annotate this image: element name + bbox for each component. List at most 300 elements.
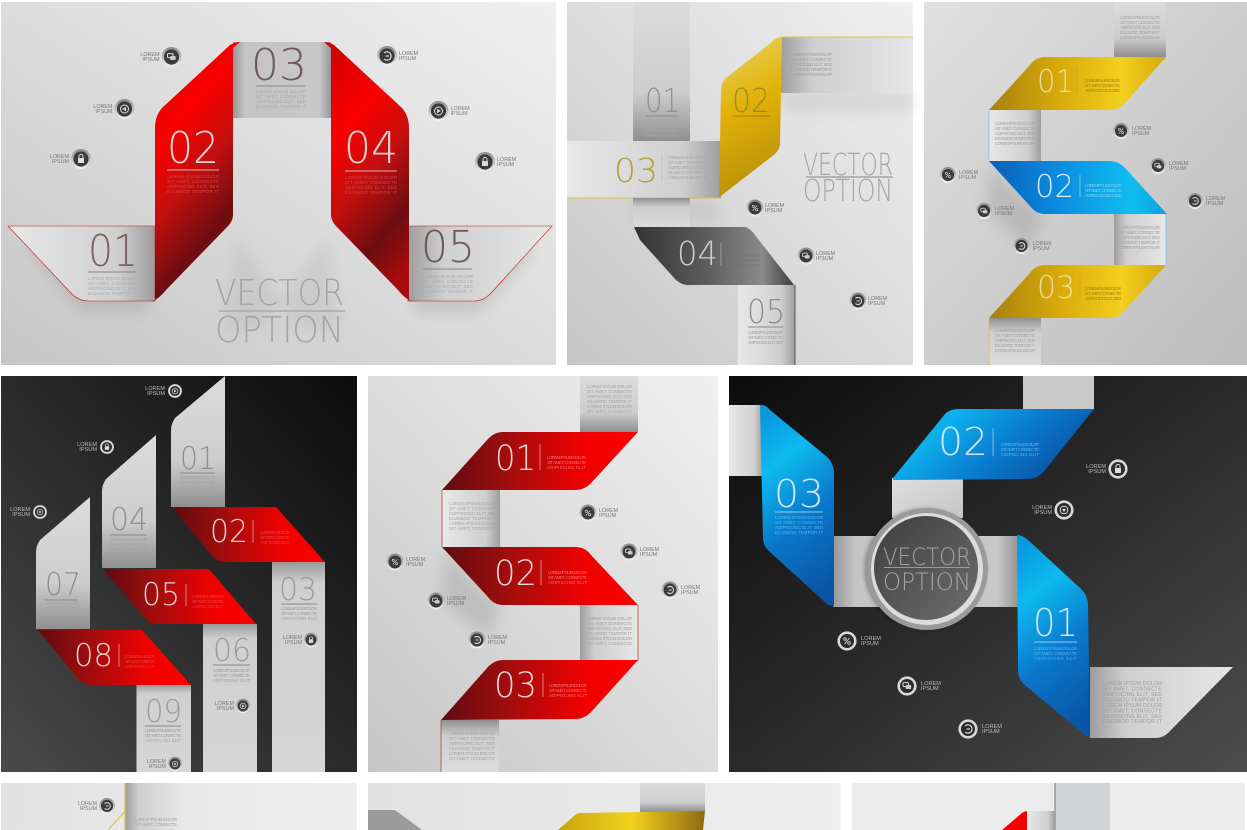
ribbon step 04 dark — [634, 227, 794, 285]
icon: gear on column 09 — [147, 757, 182, 771]
grey column — [1055, 783, 1110, 830]
icon: euro left: IPSUM — [488, 640, 506, 646]
icon: euro: IPSUM — [982, 729, 1000, 735]
body text: LOREM IPSUM DOLOR — [135, 817, 177, 822]
column body texts: SIT AMET, CONSECTE — [1120, 20, 1160, 25]
step 02 number and text: SIT AMET, CONSECTE — [1001, 447, 1039, 452]
icon: lock: LOREM — [77, 442, 97, 448]
icon: lock: IPSUM — [79, 447, 97, 453]
column body texts: SIT AMET, CONSECTE — [587, 409, 632, 414]
step 06 text: LOREM IPSUM DOLOR — [213, 668, 250, 673]
step 04 number and text: SIT AMET, CONSECTE — [345, 180, 397, 185]
step 04 text: SIT AMET, CONSECTE — [110, 542, 147, 547]
icon: euro right — [662, 582, 701, 598]
icon: gear — [1032, 500, 1074, 520]
step 01 number and text: ADIPISCING ELIT, SED — [88, 286, 137, 291]
icon: chat right — [620, 544, 660, 560]
column body texts: LOREM IPSUM DOLOR — [995, 348, 1035, 353]
icon: lock on column 03: IPSUM — [285, 640, 303, 646]
step 04 number and text: 04 — [677, 234, 718, 273]
step 03 number and text: ADIPISCING ELIT, SED — [668, 165, 707, 170]
step 01 number and text: LOREM IPSUM DOLOR — [645, 118, 679, 123]
icon: percent: IPSUM — [765, 208, 783, 214]
step 05 number and text: LOREM IPSUM DOLOR — [423, 274, 473, 279]
grey end body text: SIT AMET, CONSECTE — [1103, 686, 1163, 692]
step 05 number and text: LOREM IPSUM DOLOR — [748, 330, 783, 335]
step 01 text: SIT AMET, CONSECTE — [180, 480, 215, 485]
ribbon 05 — [103, 569, 256, 624]
panel: cropped bottom left — [1, 783, 357, 830]
column body texts: EIUSMOD TEMPOR IT — [449, 516, 497, 521]
ribbon step 01 — [442, 432, 638, 490]
icon: gear: LOREM — [1032, 505, 1052, 511]
grey column — [125, 783, 181, 830]
column 01 — [171, 376, 225, 507]
step 02 number and text — [494, 554, 587, 594]
step 04 text: LOREM IPSUM DOLOR — [110, 537, 147, 542]
icon: euro: LOREM — [982, 724, 1002, 730]
step 02 number and text: ADIPISCING ELIT — [1001, 452, 1039, 457]
column 04 — [102, 435, 156, 568]
column body texts: ADIPISCING ELIT, SED — [449, 511, 497, 516]
column 06 — [203, 624, 257, 772]
icon: chat left — [976, 203, 1015, 219]
step 01 number and text — [88, 226, 138, 296]
step 02 number and text: SIT AMET, CONSECTE — [167, 179, 219, 184]
step 01 number and text — [1037, 64, 1120, 100]
step 01 text — [180, 441, 216, 490]
step 03 number and text: LOREM IPSUM DOLOR — [1085, 286, 1121, 291]
grey end body text: ADIPISCING ELIT, SED — [1103, 714, 1162, 720]
step 04 text: 04 — [110, 502, 148, 538]
step 02 text: 02 — [210, 514, 248, 550]
step 04 number and text — [344, 123, 398, 195]
step 01 number and text: LOREM IPSUM DOLOR — [1034, 646, 1077, 651]
icon: euro right — [1187, 193, 1226, 209]
icon: back — [93, 99, 134, 119]
icon: euro — [850, 292, 888, 310]
icon: chat: LOREM — [921, 681, 941, 687]
icon: euro left: LOREM — [488, 635, 508, 641]
ribbon step 05 column — [738, 285, 795, 365]
column body texts: LOREM IPSUM DOLOR — [587, 384, 632, 389]
step 09 text: 09 — [145, 694, 182, 730]
column body texts: LOREM IPSUM DOLOR — [587, 616, 632, 621]
grey horizontal connector — [833, 536, 1018, 607]
step 01 number and text: 01 — [645, 81, 680, 120]
panel: red zigzag ribbon — [368, 376, 718, 772]
icon: percent — [1113, 123, 1152, 139]
grey end body text: SIT AMET, CONSECTE — [1103, 708, 1163, 714]
step 01 number and text — [495, 439, 586, 479]
icon: chat: LOREM — [140, 52, 160, 58]
center badge with vector option title: VECTOR — [883, 543, 971, 571]
icon: play — [428, 101, 470, 121]
vector option title — [215, 273, 345, 351]
ribbon step 02 blue — [989, 161, 1167, 214]
icon: lock on column 03 — [283, 633, 318, 647]
step 01 number and text: LOREM IPSUM DOLOR — [88, 276, 137, 281]
column body texts: EIUSMOD TEMPOR IT — [995, 136, 1035, 141]
ribbon step 03 — [441, 660, 638, 720]
icon: chat: IPSUM — [142, 57, 160, 63]
step 01 number and text: ADIPISCING ELIT — [1034, 656, 1077, 661]
icon: percent right — [580, 504, 619, 522]
icon: lock on column 03: LOREM — [283, 635, 303, 641]
step 01 text: ADIPISCING ELIT — [180, 485, 215, 490]
icon: gear: LOREM — [10, 507, 30, 513]
step 02 number and text: SIT AMET, CONSECTE — [1085, 188, 1122, 193]
panel: gold and dark folded ribbon — [567, 2, 913, 365]
ribbon 02 — [172, 507, 325, 562]
icon: lock right: LOREM — [497, 157, 517, 163]
step 01 number and text: ADIPISCING ELIT — [547, 465, 586, 470]
ribbon top right band — [780, 37, 913, 93]
step 05 number and text: 05 — [747, 292, 785, 331]
column body texts: EIUSMOD TEMPOR IT — [587, 399, 632, 404]
step 01 number and text: SIT AMET, CONSECTE — [88, 281, 137, 286]
step 05 number and text: 05 — [421, 222, 475, 273]
step 03 number and text: ADIPISCING ELIT, SED — [256, 99, 306, 104]
step 05 number and text — [421, 222, 475, 294]
step 04 number and text — [677, 234, 760, 273]
vector option title: OPTION — [803, 174, 893, 209]
center badge with vector option title — [865, 508, 988, 630]
step 03 number and text: ADIPISCING ELIT, SED — [1085, 296, 1121, 301]
step 04 number and text: SIT AMET, CONSECTE — [726, 258, 760, 263]
step 02 text: ADIPISCING ELIT — [260, 540, 290, 545]
icon: play: LOREM — [450, 106, 470, 112]
step 03 number and text — [1037, 270, 1121, 306]
step 09 text: ADIPISCING ELIT — [145, 738, 181, 743]
icon: lock — [1086, 459, 1128, 479]
icon: percent left: LOREM — [406, 557, 426, 563]
grey vertical connector — [892, 478, 963, 518]
step 03 number and text: SIT AMET, CONSECTE — [668, 160, 707, 165]
step 02 number and text: LOREM IPSUM DOLOR — [548, 570, 587, 575]
step 03 number and text: LOREM IPSUM DOLOR — [775, 515, 823, 520]
column body texts: SIT AMET, CONSECTE — [1119, 230, 1160, 235]
step 05 number and text: ADIPISCING ELIT, SED — [423, 284, 473, 289]
icon: euro left: IPSUM — [1032, 246, 1050, 252]
step 04 number and text: ADIPISCING ELIT, SED — [726, 263, 760, 268]
icon: percent — [746, 200, 785, 216]
column body texts: ADIPISCING ELIT, SED — [1119, 235, 1160, 240]
step 03 number and text: SIT AMET, CONSECTE — [256, 94, 306, 99]
vector option title: VECTOR — [215, 273, 344, 314]
step 01 number and text: LOREM IPSUM DOLOR — [1085, 78, 1120, 83]
top band text: ADIPISCING ELIT, SED — [791, 62, 832, 67]
icon: percent right: IPSUM — [599, 513, 617, 519]
ribbon step 03 band — [567, 141, 721, 198]
icon: percent left: IPSUM — [406, 562, 424, 568]
ribbon right column — [1114, 214, 1166, 265]
step 01 number and text: SIT AMET, CONSECTE — [645, 123, 679, 128]
top band text: EIUSMOD TEMPOR IT — [791, 67, 832, 72]
icon: lock: LOREM — [1086, 464, 1106, 470]
step 03 number and text: 03 — [494, 666, 537, 706]
step 07 text: 07 — [45, 567, 81, 603]
icon: percent left: LOREM — [959, 170, 979, 176]
icon: percent left: IPSUM — [959, 175, 977, 181]
ribbon step 02 — [150, 42, 240, 302]
column body texts: LOREM IPSUM DOLOR — [1119, 245, 1160, 250]
left grey fragment — [368, 810, 422, 830]
vector option title: OPTION — [215, 310, 344, 351]
column body texts: ADIPISCING ELIT, SED — [995, 338, 1035, 343]
step 05 text: LOREM IPSUM DOLOR — [192, 594, 224, 599]
vector option title — [803, 148, 893, 209]
step 03 number and text: ADIPISCING ELIT — [549, 693, 587, 698]
icon: chat right — [1150, 158, 1189, 174]
icon: percent: LOREM — [861, 636, 881, 642]
column body texts: LOREM IPSUM DOLOR — [1120, 35, 1160, 40]
step 03 text: 03 — [279, 572, 317, 608]
column body texts: SIT AMET, CONSECTE — [449, 736, 495, 741]
column 03 — [272, 562, 325, 772]
icon: chat right: LOREM — [640, 547, 660, 553]
ribbon step 03 — [233, 42, 331, 118]
step 04 number and text: LOREM IPSUM DOLOR — [726, 253, 760, 258]
icon: euro: IPSUM — [399, 56, 417, 62]
column body texts: SIT AMET, CONSECTE — [449, 506, 497, 511]
ribbon step 05 — [408, 226, 552, 301]
icon: chat left: IPSUM — [447, 601, 465, 607]
icon: euro — [78, 798, 115, 814]
icon: lock right — [475, 152, 517, 172]
step 03 number and text: EIUSMOD TEMPOR IT — [775, 530, 823, 535]
column body texts: ADIPISCING ELIT, SED — [587, 626, 632, 631]
icon: gear — [10, 505, 47, 519]
step 03 number and text: 03 — [1037, 270, 1075, 306]
grey end body text: LOREM IPSUM DOLOR — [1103, 681, 1162, 687]
column body texts: LOREM IPSUM DOLOR — [995, 121, 1035, 126]
step 05 number and text: SIT AMET, CONSECTE — [423, 279, 473, 284]
step 08 text: 08 — [74, 638, 113, 674]
step 01 number and text: 01 — [1037, 64, 1074, 100]
icon: euro: IPSUM — [868, 301, 886, 307]
column body texts: EIUSMOD TEMPOR IT — [449, 746, 495, 751]
icon: euro left — [468, 632, 508, 648]
icon: euro left: LOREM — [1032, 241, 1052, 247]
column body texts: LOREM IPSUM DOLOR — [587, 636, 632, 641]
icon: gear: IPSUM — [1034, 510, 1052, 516]
panel: cropped bottom right — [852, 783, 1245, 830]
step 04 number and text: ADIPISCING ELIT, SED — [345, 185, 397, 190]
blue ribbon 02 — [893, 409, 1094, 480]
blue ribbon 01 — [1017, 535, 1090, 737]
column body texts: ADIPISCING ELIT, SED — [449, 741, 495, 746]
grey column — [640, 783, 705, 812]
step 03 text: SIT AMET, CONSECTE — [281, 611, 317, 616]
icon: chat right: IPSUM — [1169, 166, 1187, 172]
step 02 number and text — [1035, 169, 1122, 205]
icon: play on column 06: IPSUM — [217, 706, 235, 712]
icon: play on column 06 — [215, 699, 250, 713]
icon: chat: IPSUM — [921, 686, 939, 692]
icon: euro right: IPSUM — [1206, 201, 1224, 207]
step 03 number and text: 03 — [774, 472, 824, 516]
step 02 text — [210, 514, 290, 550]
ribbon step 03 gold — [989, 265, 1166, 318]
column body texts: EIUSMOD TEMPOR IT — [1119, 240, 1160, 245]
ribbon left column lower — [989, 318, 1041, 365]
column body texts: LOREM IPSUM DOLOR — [995, 328, 1035, 333]
ribbon connector — [633, 198, 690, 228]
gold ribbon — [558, 811, 705, 830]
step 03 text: LOREM IPSUM DOLOR — [281, 606, 317, 611]
icon: euro right: LOREM — [1206, 196, 1226, 202]
step 03 number and text: LOREM IPSUM DOLOR — [668, 155, 707, 160]
blue ribbon 03 — [760, 405, 834, 606]
grey fold — [1027, 811, 1055, 830]
panel: gold and blue zigzag ribbon — [924, 2, 1247, 365]
icon: chat left — [428, 592, 467, 610]
grey stub top — [1023, 376, 1094, 409]
ribbon top column — [580, 376, 638, 432]
step 02 number and text — [938, 420, 1039, 464]
step 05 text — [142, 577, 224, 613]
step 07 text: SIT AMET, CONSECTE — [45, 606, 78, 611]
column 09 — [136, 685, 191, 772]
icon: lock: IPSUM — [1088, 469, 1106, 475]
icon: percent: LOREM — [765, 203, 785, 209]
ribbon left column upper — [989, 110, 1041, 161]
step 02 number and text: EIUSMOD TEMPOR IT — [167, 189, 219, 194]
step 02 number and text: 02 — [494, 554, 537, 594]
icon: euro: IPSUM — [80, 806, 98, 812]
icon: chat: LOREM — [816, 251, 836, 257]
top band text: LOREM IPSUM DOLOR — [791, 72, 832, 77]
column body texts: SIT AMET, CONSECTE — [587, 389, 632, 394]
icon: lock: LOREM — [50, 154, 70, 160]
column 07 — [36, 497, 90, 629]
icon: lock right: IPSUM — [497, 162, 515, 168]
step 01 number and text: ADIPISCING ELIT, SED — [1085, 88, 1120, 93]
step 02 number and text: 02 — [1035, 169, 1074, 205]
step 03 number and text: SIT AMET, CONSECTE — [1085, 291, 1121, 296]
icon: euro left — [1014, 238, 1052, 254]
icon: play: IPSUM — [450, 111, 468, 117]
icon: percent left — [386, 554, 426, 570]
step 01 number and text: SIT AMET, CONSECTE — [547, 460, 586, 465]
top band text: SIT AMET, CONSECTE — [791, 57, 832, 62]
step 03 number and text: 03 — [614, 151, 658, 190]
step 07 text: ADIPISCING ELIT — [45, 611, 78, 616]
step 01 number and text: ADIPISCING ELIT, SED — [645, 128, 679, 133]
step 09 text: LOREM IPSUM DOLOR — [145, 728, 181, 733]
step 03 number and text: LOREM IPSUM DOLOR — [549, 683, 587, 688]
step 04 number and text: LOREM IPSUM DOLOR — [345, 175, 397, 180]
step 04 text: ADIPISCING ELIT — [110, 547, 147, 552]
icon: gear on column 09: IPSUM — [149, 764, 167, 770]
step 02 number and text: SIT AMET, CONSECTE — [548, 575, 587, 580]
column body texts: SIT AMET, CONSECTE — [449, 526, 497, 531]
center badge with vector option title: OPTION — [883, 568, 971, 596]
ribbon step 04 — [324, 42, 414, 302]
grey end body text: ADIPISCING ELIT, SED — [1103, 692, 1162, 698]
step 01 text: LOREM IPSUM DOLOR — [180, 475, 215, 480]
panel: dark staircase with red ribbons — [1, 376, 357, 772]
step 07 text — [45, 567, 81, 616]
grey end body text: EIUSMOD TEMPOR IT — [1103, 698, 1163, 704]
step 03 number and text: SIT AMET, CONSECTE — [549, 688, 587, 693]
column body texts: EIUSMOD TEMPOR IT — [995, 343, 1035, 348]
panel: dark pinwheel with blue ribbons — [729, 376, 1247, 772]
step 02 number and text: LOREM IPSUM DOLOR — [167, 174, 219, 179]
column body texts: ADIPISCING ELIT, SED — [1120, 25, 1160, 30]
step 02 text: SIT AMET, CONSECTE — [260, 535, 290, 540]
icon: chat right: IPSUM — [640, 552, 658, 558]
step 01 number and text: 01 — [88, 226, 138, 277]
icon: chat: IPSUM — [816, 256, 834, 262]
panel: red arch ribbon with five steps — [1, 2, 556, 365]
ribbon step 02 — [442, 547, 638, 605]
icon: play top: IPSUM — [147, 391, 165, 397]
ribbon step 01 column — [633, 2, 690, 141]
step 05 number and text — [747, 292, 785, 345]
step 03 number and text: EIUSMOD TEMPOR IT — [256, 104, 306, 109]
icon: euro: LOREM — [399, 51, 419, 57]
ribbon right column — [580, 605, 638, 661]
column body texts: SIT AMET, CONSECTE — [995, 333, 1035, 338]
step 04 number and text: EIUSMOD TEMPOR IT — [345, 190, 397, 195]
column body texts: LOREM IPSUM DOLOR — [1120, 15, 1160, 20]
icon: gear on column 09: LOREM — [147, 759, 167, 765]
column body texts: EIUSMOD TEMPOR IT — [587, 631, 632, 636]
icon: back: IPSUM — [95, 109, 113, 115]
icon: chat — [897, 676, 941, 696]
step 01 number and text: 01 — [495, 439, 536, 479]
grey ribbon end — [1090, 667, 1233, 738]
icon: percent: LOREM — [1132, 126, 1152, 132]
icon: lock: IPSUM — [52, 159, 70, 165]
column body texts: LOREM IPSUM DOLOR — [449, 731, 495, 736]
icon: euro — [958, 719, 1002, 739]
step 05 text: SIT AMET, CONSECTE — [192, 599, 224, 604]
icon: chat — [140, 47, 182, 67]
step 01 number and text: 01 — [1033, 601, 1078, 645]
ribbon 08 — [38, 630, 191, 685]
ribbon left column upper — [442, 490, 500, 547]
column body texts: ADIPISCING ELIT, SED — [995, 131, 1035, 136]
step 03 number and text: EIUSMOD TEMPOR IT — [668, 170, 707, 175]
grey stub left — [729, 405, 763, 476]
icon: lock — [50, 149, 91, 169]
step 08 text: ADIPISCING ELIT — [125, 664, 155, 669]
step 02 number and text: LOREM IPSUM DOLOR — [1085, 183, 1122, 188]
icon: percent left — [940, 167, 979, 183]
body text: SIT AMET, CONSECTE — [135, 822, 177, 827]
column body texts: LOREM IPSUM DOLOR — [449, 521, 497, 526]
icon: play top — [145, 384, 182, 398]
icon: play on column 06: LOREM — [215, 701, 235, 707]
step 02 number and text: ADIPISCING ELIT, SED — [1085, 193, 1122, 198]
step 01 number and text: LOREM IPSUM DOLOR — [547, 455, 586, 460]
icon: percent: IPSUM — [1132, 131, 1150, 137]
step 03 number and text — [774, 472, 824, 535]
step 05 number and text: EIUSMOD TEMPOR IT — [423, 289, 473, 294]
step 01 number and text: EIUSMOD TEMPOR IT — [88, 291, 137, 296]
step 01 number and text: SIT AMET, CONSECTE — [1085, 83, 1120, 88]
step 01 number and text — [1033, 601, 1078, 661]
step 01 text: 01 — [180, 441, 216, 477]
column body texts: SIT AMET, CONSECTE — [995, 126, 1035, 131]
step 07 text: LOREM IPSUM DOLOR — [45, 601, 78, 606]
step 03 number and text: ADIPISCING ELIT, SED — [775, 525, 823, 530]
step 02 number and text — [167, 123, 219, 194]
icon: chat right: LOREM — [1169, 161, 1189, 167]
